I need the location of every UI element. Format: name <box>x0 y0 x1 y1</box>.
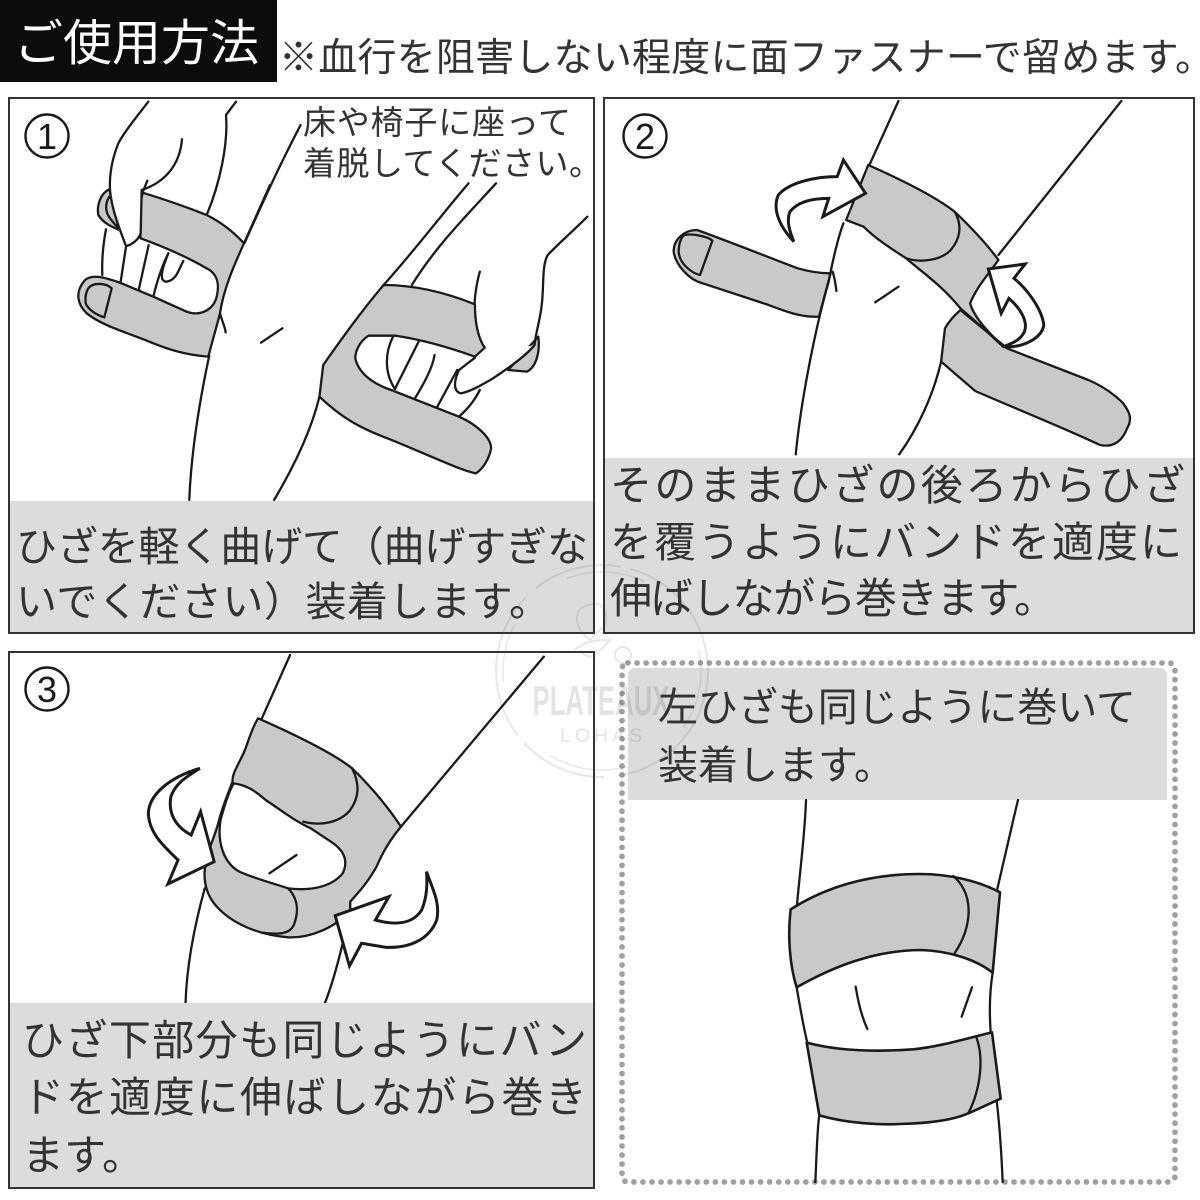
arrow: right wrap direction <box>335 872 438 966</box>
panel: step 1 <box>9 98 602 633</box>
caption: step 3 <box>10 1003 593 1187</box>
caption: step 2 <box>605 458 1193 632</box>
caption: step 2: 伸ばしながら巻きます。 <box>610 575 1056 622</box>
step number 2: 2 <box>635 116 655 157</box>
note: hook and loop fastener advice: ※血行を阻害しない程度に面ファスナーで留めます。 <box>279 37 1200 80</box>
note: sit while putting on <box>303 104 602 182</box>
caption: step 1: いでください）装着します。 <box>16 579 550 625</box>
illustration: wrapping behind the knee <box>674 101 1130 454</box>
illustration: left hand holding the band behind the knee <box>78 102 270 357</box>
panel: step 2 <box>604 98 1194 633</box>
illustration: wrapping below the knee <box>148 655 544 1003</box>
step number 3 <box>26 668 68 710</box>
caption: step 1 <box>10 501 593 632</box>
arrow: lower wrap direction <box>988 264 1044 347</box>
caption: step 3: ます。 <box>22 1132 144 1179</box>
caption: left knee <box>628 668 1167 800</box>
watermark: Plateaux Lohas <box>496 565 708 777</box>
caption: step 3: ひざ下部分も同じようにバン <box>22 1017 587 1064</box>
watermark: Plateaux Lohas: PLATEAUX <box>532 677 670 724</box>
arrow: upper wrap direction <box>776 160 866 242</box>
caption: step 3: ドを適度に伸ばしながら巻き <box>22 1074 587 1121</box>
arrow: left wrap direction <box>148 768 214 884</box>
panel: step 3 <box>9 652 594 1188</box>
note: sit while putting on: 着脱してください。 <box>303 145 602 182</box>
illustration: finished bands on the knee <box>789 800 1018 1182</box>
step number 3: 3 <box>37 669 57 710</box>
watermark: Plateaux Lohas: LOHAS <box>560 726 642 747</box>
caption: left knee: 装着します。 <box>658 744 894 788</box>
caption: left knee: 左ひざも同じように巻いて <box>658 686 1136 730</box>
illustration: leg and right hand fitting the band <box>189 125 587 500</box>
step number 1: 1 <box>37 116 57 157</box>
title: usage instructions: ご使用方法 <box>14 17 259 71</box>
step number 1 <box>26 114 68 158</box>
panel: left knee note <box>622 663 1175 1182</box>
caption: step 2: を覆うようにバンドを適度に <box>610 519 1182 566</box>
step number 2 <box>624 114 666 158</box>
title: usage instructions <box>0 0 277 82</box>
caption: step 2: そのままひざの後ろからひざ <box>610 462 1185 509</box>
note: sit while putting on: 床や椅子に座って <box>303 104 571 141</box>
caption: step 1: ひざを軽く曲げて（曲げすぎな <box>16 524 588 570</box>
